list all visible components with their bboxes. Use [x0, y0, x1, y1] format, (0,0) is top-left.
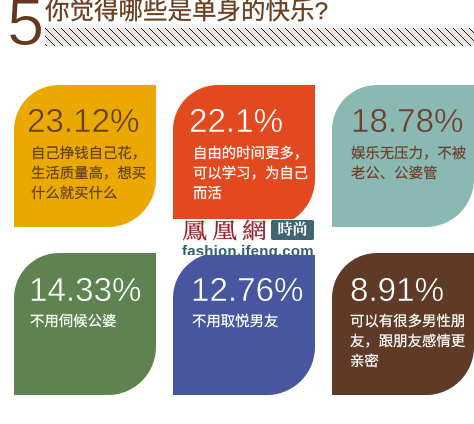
percentage 12.76%: 12.76%	[191, 272, 304, 309]
description: 友，跟朋友感情更	[350, 334, 465, 350]
percentage 14.33%: 14.33%	[29, 272, 142, 309]
panel: 14.33%	[14, 253, 156, 395]
description	[193, 146, 308, 202]
description	[350, 314, 465, 370]
description: 娱乐无压力，不被	[351, 146, 466, 162]
description: 什么就买什么	[31, 186, 117, 202]
description: 生活质量高，想买	[31, 166, 146, 182]
description	[31, 146, 146, 202]
percentage 22.1%: 22.1%	[189, 103, 283, 140]
percentage 18.78%: 18.78%	[351, 103, 464, 140]
panel: 8.91%	[332, 253, 474, 395]
description: 可以学习，为自己	[193, 166, 308, 182]
description	[351, 146, 466, 182]
description: 自己挣钱自己花，	[31, 146, 146, 162]
panel: 23.12%	[14, 85, 156, 227]
percentage 8.91%: 8.91%	[350, 272, 444, 309]
panel: 12.76%	[173, 253, 315, 395]
channel badge: 時尚	[277, 222, 308, 238]
logo: fashion.ifeng.com	[173, 219, 317, 255]
description: 不用伺候公婆	[30, 314, 116, 330]
description: 老公、公婆管	[351, 166, 437, 182]
logo name: 鳳凰網	[182, 220, 272, 244]
description: 可以有很多男性朋	[350, 314, 465, 330]
description: 不用取悦男友	[192, 314, 278, 330]
channel badge	[271, 220, 314, 240]
description: 而活	[193, 186, 222, 202]
description: 亲密	[350, 354, 379, 370]
description: 自由的时间更多，	[193, 146, 308, 162]
hatched band	[45, 28, 474, 46]
panel: 22.1%	[173, 85, 315, 227]
percentage 23.12%: 23.12%	[27, 103, 140, 140]
panel: 18.78%	[332, 85, 474, 227]
